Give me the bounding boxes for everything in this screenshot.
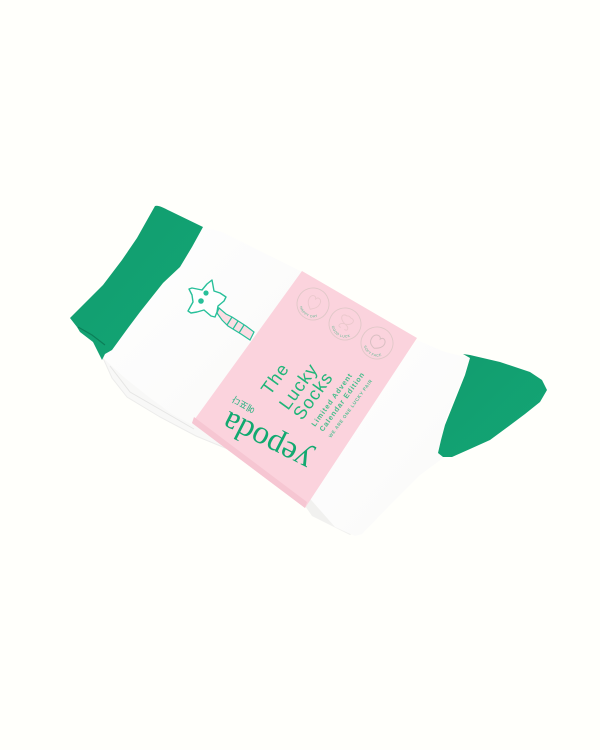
star eyes — [203, 290, 209, 296]
icon badge: soft face — [360, 326, 394, 360]
sock: white foot — [305, 340, 470, 536]
subheading: Limited Advent Calendar Edition: Calendar Edition — [317, 370, 367, 433]
brand name in Korean: 예포다 — [230, 393, 257, 415]
sock: green cuff — [70, 206, 203, 360]
subheading: Limited Advent Calendar Edition: Limited Advent — [309, 371, 354, 428]
icon badge: good luck: GOOD LUCK — [332, 326, 350, 338]
icon badge: happy day — [296, 288, 330, 320]
heading: The Lucky Socks: Socks — [289, 368, 337, 423]
heading: The Lucky Socks: Lucky — [275, 360, 322, 413]
brand logo: yepoda: yepoda — [216, 403, 318, 479]
sock: green toe — [438, 354, 547, 457]
heading: The Lucky Socks — [257, 359, 337, 423]
tagline: WE ARE ONE LUCKY PAIR — [328, 378, 374, 439]
heading: The Lucky Socks: The — [257, 359, 293, 398]
icon badge: happy day: HAPPY DAY — [300, 306, 317, 318]
icon badge: soft face: SOFT FACE — [364, 346, 382, 357]
icon: embroidered star wand — [188, 280, 254, 340]
pink packaging band — [192, 271, 417, 508]
sock: lower folded layer — [103, 340, 358, 535]
icon badge: good luck — [328, 308, 362, 340]
wand handle — [217, 308, 254, 340]
sock: white leg — [103, 227, 302, 425]
star outline — [188, 280, 226, 317]
